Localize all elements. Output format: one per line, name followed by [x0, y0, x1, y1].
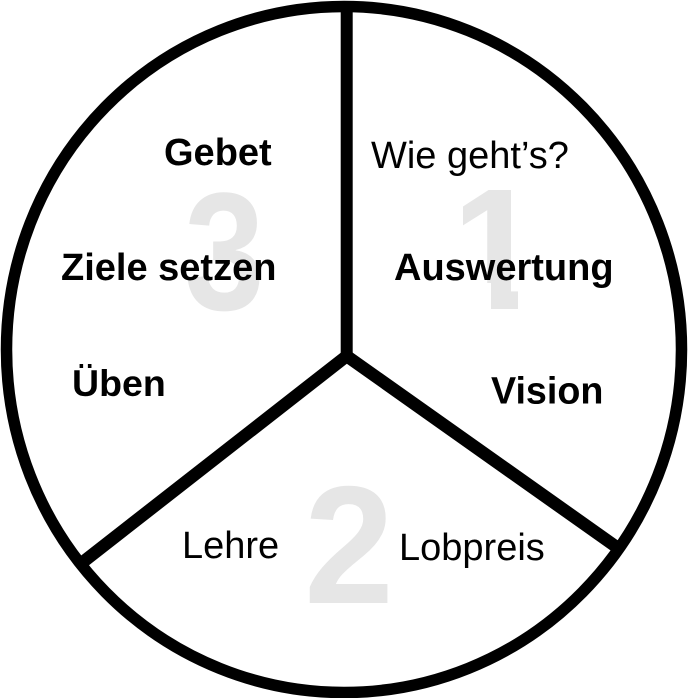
big number 2: 2 [304, 451, 394, 639]
label: Gebet: Gebet [164, 132, 272, 174]
label: Lehre: Lehre [182, 525, 279, 567]
label: Vision: Vision [491, 370, 603, 412]
big number 1: 1 [447, 152, 543, 346]
spokes [80, 4, 621, 564]
label: Auswertung: Auswertung [394, 247, 614, 289]
label: Üben: Üben [72, 362, 166, 404]
label: Ziele setzen: Ziele setzen [61, 247, 276, 289]
big number 3: 3 [184, 158, 265, 346]
label: Wie geht's?: Wie geht’s? [371, 135, 569, 177]
label: Lobpreis: Lobpreis [399, 527, 545, 569]
